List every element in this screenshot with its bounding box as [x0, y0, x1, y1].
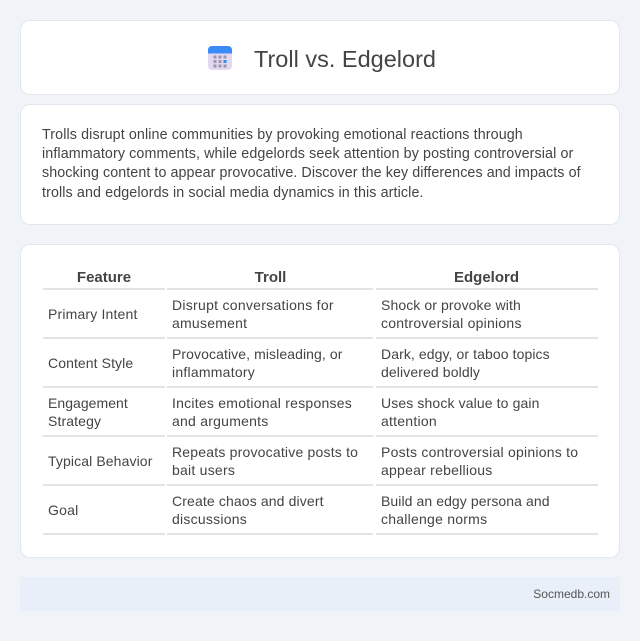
- intro text: Trolls disrupt online communities by provoking emotional reactions through: [42, 127, 523, 143]
- Troll: Typical Behavior: Repeats provocative posts to: [172, 444, 358, 460]
- Troll: Goal: Create chaos and divert: [172, 493, 324, 509]
- column header: Feature: Feature: [77, 269, 131, 286]
- Troll: Engagement Strategy: and arguments: [172, 413, 269, 429]
- Troll: Primary Intent: [172, 297, 334, 331]
- icon: calendar: [208, 46, 232, 70]
- Edgelord: Typical Behavior: [381, 444, 578, 478]
- intro text: shocking content to appear provocative. Discover the key differences and impacts of: [42, 165, 581, 181]
- title: Troll vs. Edgelord: [254, 46, 436, 72]
- row: Content Style: Content Style: [48, 355, 133, 371]
- Troll: Goal: discussions: [172, 511, 247, 527]
- Edgelord: Typical Behavior: Posts controversial opinions to: [381, 444, 578, 460]
- panel: introduction: [20, 104, 620, 225]
- Edgelord: Engagement Strategy: attention: [381, 413, 437, 429]
- row: Typical Behavior: Typical Behavior: [48, 453, 152, 469]
- Troll: Engagement Strategy: Incites emotional responses: [172, 395, 352, 411]
- intro text: [42, 127, 581, 201]
- row: Engagement Strategy: [48, 395, 128, 429]
- footer source text: Socmedb.com: [533, 587, 610, 601]
- Edgelord: Primary Intent: Shock or provoke with: [381, 297, 521, 313]
- row: Engagement Strategy: Engagement: [48, 395, 128, 411]
- column header: Edgelord: Edgelord: [454, 269, 519, 286]
- intro text: inflammatory comments, while edgelords seek attention by posting controversial or: [42, 146, 573, 162]
- Edgelord: Engagement Strategy: Uses shock value to gain: [381, 395, 540, 411]
- Edgelord: Goal: challenge norms: [381, 511, 487, 527]
- Troll: Engagement Strategy: [172, 395, 352, 429]
- Edgelord: Goal: Build an edgy persona and: [381, 493, 550, 509]
- Troll: Typical Behavior: [172, 444, 358, 478]
- panel: title card: [20, 20, 620, 95]
- column header: Troll: Troll: [255, 269, 286, 286]
- footer bar: [20, 577, 620, 611]
- Troll: Content Style: Provocative, misleading, or: [172, 346, 343, 362]
- Troll: Primary Intent: amusement: [172, 315, 247, 331]
- Edgelord: Content Style: [381, 346, 550, 380]
- Troll: Typical Behavior: bait users: [172, 462, 235, 478]
- Edgelord: Primary Intent: [381, 297, 522, 331]
- row: Goal: Goal: [48, 502, 79, 518]
- row: Primary Intent: Primary Intent: [48, 306, 138, 322]
- Troll: Primary Intent: Disrupt conversations for: [172, 297, 334, 313]
- Edgelord: Content Style: delivered boldly: [381, 364, 480, 380]
- Troll: Goal: [172, 493, 324, 527]
- Edgelord: Content Style: Dark, edgy, or taboo topics: [381, 346, 550, 362]
- Edgelord: Typical Behavior: appear rebellious: [381, 462, 492, 478]
- Troll: Content Style: inflammatory: [172, 364, 255, 380]
- row: Engagement Strategy: Strategy: [48, 413, 101, 429]
- intro text: trolls and edgelords in social media dynamics in this article.: [42, 185, 424, 201]
- Edgelord: Primary Intent: controversial opinions: [381, 315, 522, 331]
- Edgelord: Goal: [381, 493, 550, 527]
- Troll: Content Style: [172, 346, 343, 380]
- Edgelord: Engagement Strategy: [381, 395, 540, 429]
